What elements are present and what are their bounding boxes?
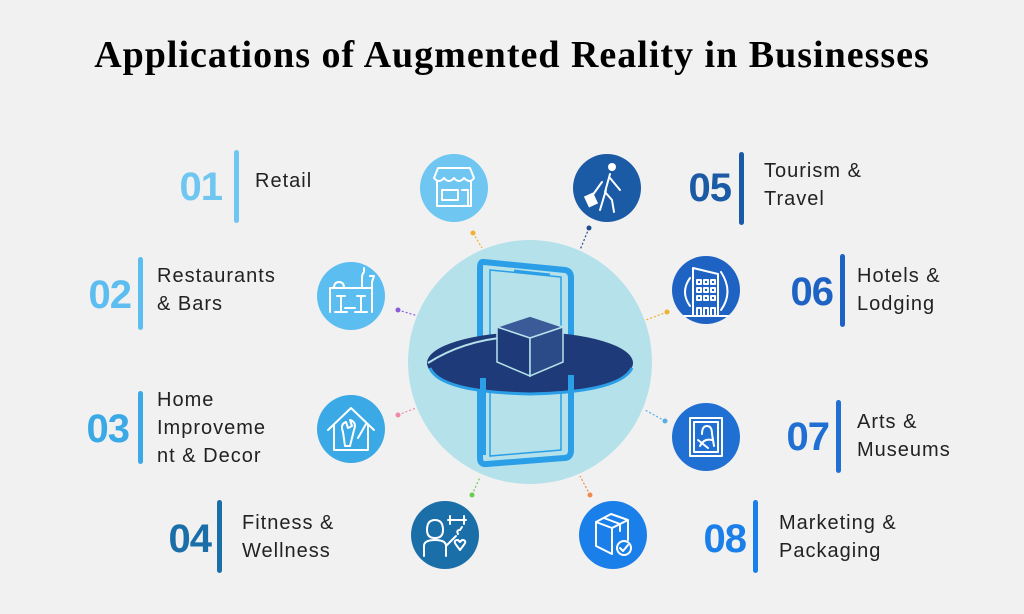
item 06: 06 — [790, 270, 833, 314]
item 01: Retail — [255, 170, 312, 192]
item 02: & Bars — [157, 293, 223, 315]
title: Applications of Augmented Reality in Businesses — [94, 34, 930, 76]
item 07: Arts & — [857, 411, 917, 433]
item 07: 07 — [786, 415, 829, 459]
item 04: 04 — [168, 517, 213, 561]
icon: restaurants bar — [317, 262, 385, 330]
item 03 — [86, 389, 266, 467]
item 02 — [88, 257, 276, 330]
icon: retail store — [420, 154, 488, 222]
item 03: 03 — [86, 407, 129, 451]
item 05: Travel — [764, 188, 825, 210]
item 08 — [704, 500, 897, 573]
item 02: 02 — [88, 273, 131, 317]
item 06: Lodging — [857, 293, 935, 315]
icon: fitness — [411, 501, 479, 569]
icon: packaging box — [579, 501, 647, 569]
item 08: Packaging — [779, 540, 881, 562]
icon: arts museum painting — [672, 403, 740, 471]
item 05 — [688, 152, 862, 225]
item 06: Hotels & — [857, 265, 941, 287]
item 05: Tourism & — [764, 160, 862, 182]
icon: hotel building — [672, 256, 740, 324]
item 08: Marketing & — [779, 512, 897, 534]
item 08: 08 — [704, 517, 747, 561]
item 04: Wellness — [242, 540, 331, 562]
item 03: Home — [157, 389, 214, 411]
item 04: Fitness & — [242, 512, 334, 534]
item 06 — [790, 254, 941, 327]
icon: tourism traveller — [573, 154, 641, 222]
item 02: Restaurants — [157, 265, 276, 287]
item 04 — [168, 500, 334, 573]
connectors — [396, 226, 670, 498]
item 03: nt & Decor — [157, 445, 261, 467]
item 07 — [786, 400, 951, 473]
item 07: Museums — [857, 439, 951, 461]
item 05: 05 — [688, 166, 732, 210]
item 03: Improveme — [157, 417, 266, 439]
item 01 — [180, 150, 312, 223]
icon: home improvement — [317, 395, 385, 463]
center graphic: AR phone with cube — [408, 240, 652, 484]
item 01: 01 — [180, 165, 223, 209]
